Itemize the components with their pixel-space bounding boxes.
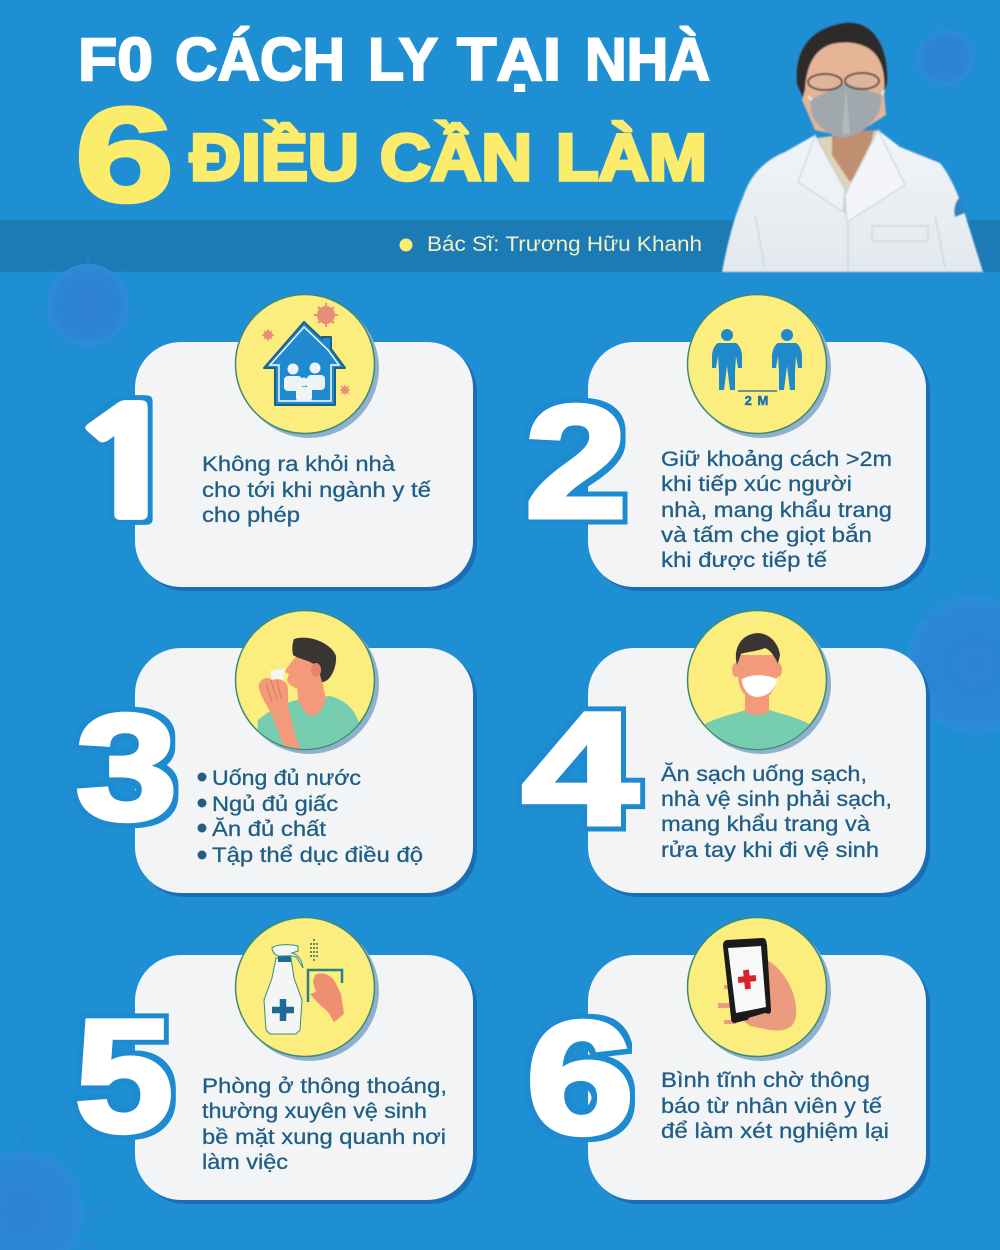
step 4 text: mang khẩu trang và: [661, 812, 870, 836]
icon: hand holding phone with medical cross: [688, 918, 831, 1061]
card: [588, 648, 926, 893]
step 1 text: cho tới khi ngành y tế: [202, 478, 431, 502]
step 5 text: bề mặt xung quanh nơi: [202, 1125, 446, 1149]
panel: step 4: [522, 610, 930, 897]
step 1 text: cho phép: [202, 503, 300, 527]
doctor byline: Bác Sĩ: Trương Hữu Khanh: [427, 233, 702, 256]
step 1 text: [202, 452, 431, 527]
decorative virus: bottom left: [0, 1130, 100, 1250]
step 3 text: Ăn đủ chất: [212, 816, 326, 841]
step 4 text: nhà vệ sinh phải sạch,: [661, 787, 892, 811]
title line 1: CÁCH: [175, 26, 345, 93]
number 6: 6: [526, 988, 634, 1167]
step 3 text: [212, 766, 423, 867]
card shadow: [139, 346, 477, 591]
title: [75, 26, 710, 230]
step 6 text: [661, 1068, 889, 1143]
step 2 text: khi được tiếp tế: [661, 548, 827, 572]
step 3 text: Uống đủ nước: [212, 766, 361, 790]
number 1: 1: [68, 391, 186, 539]
step 3 text: Tập thể dục điều độ: [212, 843, 423, 867]
panel: step 1: [68, 294, 477, 591]
card shadow: [592, 346, 930, 591]
step 5 text: thường xuyên vệ sinh: [202, 1099, 427, 1123]
panel: step 5: [75, 918, 477, 1204]
step 6 text: để làm xét nghiệm lại: [661, 1119, 889, 1143]
step 5 text: Phòng ở thông thoáng,: [202, 1074, 447, 1098]
bullets: [198, 772, 206, 860]
title line 2: LÀM: [556, 120, 707, 194]
title line 1: LY: [368, 26, 438, 93]
card shadow: [139, 959, 477, 1204]
step 2 text: Giữ khoảng cách >2m: [661, 447, 892, 471]
step 3 text: Ngủ đủ giấc: [212, 792, 338, 816]
decorative virus: top right: [911, 24, 979, 92]
icon: spray bottle and hand cleaning a surface: [236, 918, 379, 1061]
title line 1: [78, 26, 710, 93]
step 2 text: nhà, mang khẩu trang: [661, 498, 892, 522]
card: [135, 955, 473, 1200]
decorative virus: right: [890, 580, 1000, 750]
title line 1: F0: [78, 26, 153, 93]
doctor portrait: [722, 23, 983, 272]
number 5: 5: [75, 986, 173, 1165]
step 4 text: rửa tay khi đi vệ sinh: [661, 838, 879, 862]
title line 1: NHÀ: [585, 26, 710, 93]
panel: step 3: [76, 610, 477, 897]
title line 2: CẦN: [380, 120, 532, 194]
step 6 text: Bình tĩnh chờ thông: [661, 1068, 870, 1092]
card: [588, 955, 926, 1200]
step 5 text: [202, 1074, 447, 1174]
step 5 text: làm việc: [202, 1150, 288, 1174]
step 4 text: Ăn sạch uống sạch,: [661, 761, 867, 786]
title line 1: TẠI: [457, 26, 561, 93]
icon: person wearing a mask: [688, 610, 831, 760]
icon: house with family and viruses: [236, 294, 379, 438]
icon: two people two metres apart: [688, 294, 831, 438]
step 4 text: [661, 761, 892, 862]
card: [135, 648, 473, 893]
card shadow: [592, 652, 930, 897]
title line 2: [190, 120, 707, 194]
number 3: 3: [76, 683, 177, 851]
big yellow six: 6: [75, 81, 174, 230]
number 2: 2: [525, 372, 627, 551]
decorative virus: upper left: [38, 255, 138, 355]
number 4: 4: [522, 679, 638, 858]
header band: [0, 220, 1000, 272]
step 6 text: báo từ nhân viên y tế: [661, 1094, 882, 1118]
step 1 text: Không ra khỏi nhà: [202, 452, 395, 476]
step 2 text: [661, 447, 892, 572]
card shadow: [592, 959, 930, 1204]
card shadow: [139, 652, 477, 897]
card: [588, 342, 926, 587]
step 2 text: và tấm che giọt bắn: [661, 522, 872, 547]
title line 2: ĐIỀU: [190, 120, 359, 194]
card: [135, 342, 473, 587]
panel: step 6: [526, 918, 930, 1204]
icon: two people two metres apart: 2 M: [745, 393, 769, 408]
step 2 text: khi tiếp xúc người: [661, 472, 852, 496]
icon: man drinking water: [236, 610, 379, 760]
panel: step 2: [525, 294, 930, 591]
